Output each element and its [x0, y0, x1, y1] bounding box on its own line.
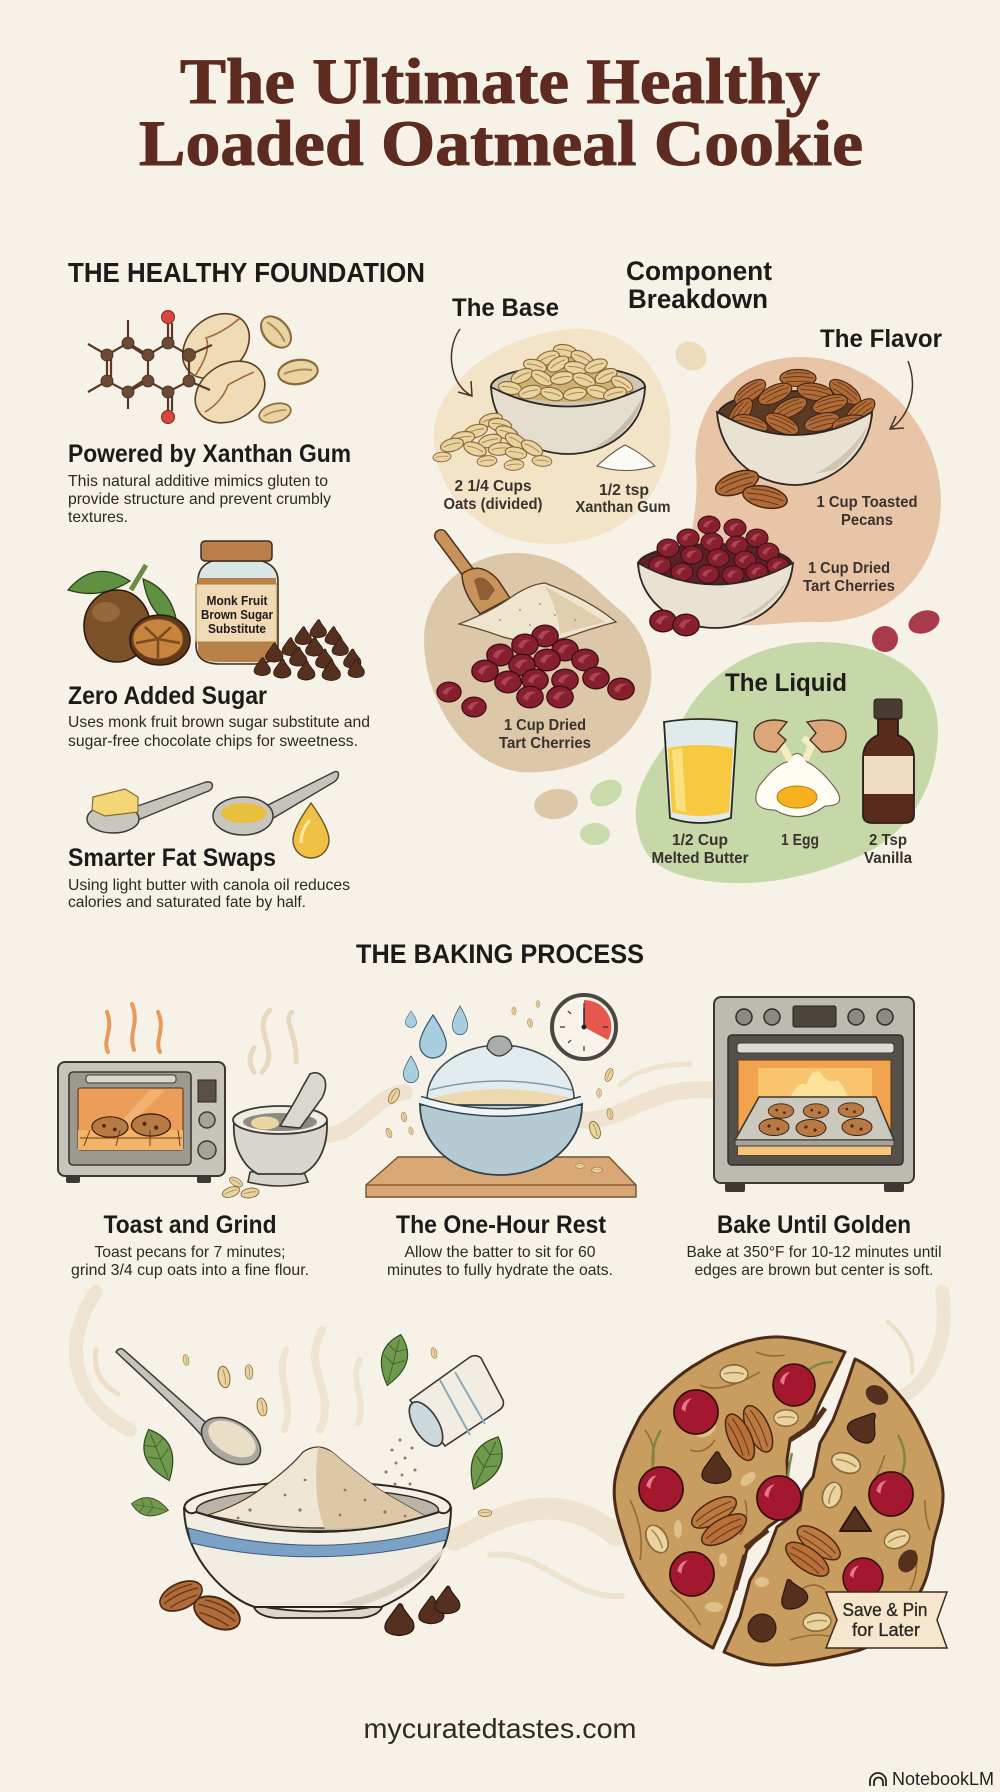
text block: the one-hour rest — [387, 1211, 613, 1279]
icon: pecans — [155, 1575, 245, 1636]
panel: the liquid — [636, 642, 938, 883]
title — [139, 46, 863, 180]
label: pecans: Pecans — [841, 512, 893, 529]
text block: smarter fat swaps: Using light butter with canola oil reduces — [68, 877, 350, 894]
footer: website: mycuratedtastes.com — [364, 1713, 636, 1744]
step: toast and grind — [58, 1004, 327, 1279]
icon: wall oven — [714, 997, 914, 1192]
icon: dried cherry pile — [437, 625, 634, 717]
text block: xanthan gum: This natural additive mimics gluten to — [68, 473, 328, 490]
icon: water drops — [403, 1006, 468, 1083]
text block: xanthan gum: Powered by Xanthan Gum — [68, 440, 351, 468]
icon: chocolate chips — [385, 1586, 460, 1636]
icon: spice shaker — [384, 1356, 503, 1486]
banner: save and pin: for Later — [852, 1620, 920, 1640]
icon: flour pile — [459, 583, 616, 642]
arrow: the flavor — [890, 361, 912, 429]
heading: component breakdown — [626, 256, 772, 314]
heading: component breakdown: Component — [626, 256, 772, 286]
icon: mortar steam — [250, 1010, 296, 1072]
text block: zero added sugar: sugar-free chocolate chips for sweetness. — [68, 733, 358, 750]
text block: toast and grind: Toast pecans for 7 minutes; — [94, 1244, 286, 1261]
text block: xanthan gum — [68, 440, 351, 526]
icon: vanilla bottle — [863, 699, 914, 823]
icon: loose pecans — [712, 465, 789, 512]
labels: liquid ingredients: Melted Butter — [652, 850, 748, 867]
text block: xanthan gum: textures. — [68, 509, 128, 526]
decorative steam and waves — [76, 1292, 944, 1596]
icon: steam — [106, 1004, 161, 1052]
text block: bake until golden: edges are brown but center is soft. — [694, 1262, 934, 1279]
icon: glass of melted butter — [664, 719, 737, 823]
label: the flavor: The Flavor — [820, 325, 942, 353]
arrow: the base — [451, 329, 472, 396]
blob: small dots — [532, 774, 627, 845]
labels: liquid ingredients: 1/2 Cup — [672, 832, 728, 849]
text block: smarter fat swaps — [68, 844, 350, 911]
text block: zero added sugar: Zero Added Sugar — [68, 682, 267, 710]
label: the liquid: The Liquid — [725, 669, 847, 697]
labels: liquid ingredients: 2 Tsp — [869, 832, 907, 849]
labels: base ingredients — [444, 478, 670, 516]
panel: the base — [433, 294, 671, 544]
decorative waves — [330, 1064, 712, 1135]
icon: xanthan gum powder — [597, 445, 655, 470]
panel: the healthy foundation — [68, 257, 425, 911]
label: the base: The Base — [452, 294, 559, 322]
label: pecans — [816, 494, 918, 529]
icon: molecule and oats — [88, 300, 319, 435]
icon: bowl of dried cherries — [638, 516, 793, 628]
icon: bowl of oats — [491, 343, 645, 454]
icon: monk fruit, jar and chocolate chips: Brown Sugar — [201, 607, 273, 622]
icon: toaster oven — [58, 1062, 225, 1183]
watermark: notebooklm: NotebookLM — [892, 1769, 994, 1789]
illustration: mixing and finished cookie — [76, 1292, 947, 1665]
labels: base ingredients: Xanthan Gum — [576, 499, 670, 516]
labels: base ingredients: 2 1/4 Cups — [454, 478, 532, 495]
title: The Ultimate Healthy — [180, 46, 820, 118]
text block: smarter fat swaps: Smarter Fat Swaps — [68, 844, 276, 872]
panel: flour and cherries — [424, 536, 651, 772]
title: Loaded Oatmeal Cookie — [139, 108, 863, 180]
icon: spoons and oil drop — [87, 772, 338, 858]
icon: cutting board — [366, 1157, 636, 1197]
icon: loose oats — [433, 411, 552, 471]
text block: zero added sugar — [68, 682, 370, 750]
labels: base ingredients: Oats (divided) — [444, 496, 542, 513]
labels: base ingredients: 1/2 tsp — [599, 482, 649, 499]
labels: liquid ingredients: Vanilla — [864, 850, 912, 867]
icon: monk fruit, jar and chocolate chips: Substitute — [208, 621, 266, 636]
icon: floating oats — [385, 1000, 615, 1173]
text block: bake until golden: Bake Until Golden — [717, 1211, 911, 1239]
icon: loose cherries — [650, 610, 699, 636]
heading: the baking process: THE BAKING PROCESS — [356, 939, 644, 969]
heading: component breakdown: Breakdown — [628, 284, 768, 314]
label: tart cherries — [499, 717, 591, 752]
icon: bowl of pecans — [717, 370, 879, 485]
panel: the flavor — [638, 325, 942, 636]
icon: covered bowl — [420, 1036, 582, 1175]
icon: wooden scoop — [441, 536, 510, 614]
step: the one-hour rest — [366, 995, 636, 1279]
icon: cracked egg — [754, 720, 846, 817]
banner: save and pin: Save & Pin — [842, 1600, 928, 1620]
icon: mixing bowl — [184, 1447, 451, 1618]
text block: smarter fat swaps: calories and saturated fate by half. — [68, 894, 306, 911]
text block: toast and grind — [71, 1211, 309, 1279]
panel: component breakdown — [424, 256, 943, 883]
blob: decorative tan dot — [670, 336, 712, 376]
text block: the one-hour rest: minutes to fully hydrate the oats. — [387, 1262, 613, 1279]
text block: bake until golden — [686, 1211, 942, 1279]
label: tart cherries: 1 Cup Dried — [504, 717, 586, 734]
label: tart cherries: Tart Cherries — [803, 578, 895, 595]
icon: leaves — [130, 1331, 511, 1519]
text block: zero added sugar: Uses monk fruit brown sugar substitute and — [68, 714, 370, 731]
text block: bake until golden: Bake at 350°F for 10-12 minutes until — [686, 1244, 942, 1261]
step: bake until golden — [686, 997, 942, 1279]
icon: floating oats — [182, 1347, 492, 1517]
panel: the baking process — [58, 939, 942, 1279]
text block: the one-hour rest: The One-Hour Rest — [396, 1211, 607, 1239]
label: pecans: 1 Cup Toasted — [816, 494, 918, 511]
labels: liquid ingredients: 1 Egg — [781, 832, 819, 849]
banner: save and pin — [826, 1592, 947, 1648]
labels: liquid ingredients — [652, 832, 912, 867]
label: tart cherries: Tart Cherries — [499, 735, 591, 752]
icon: timer — [552, 995, 616, 1059]
heading: the healthy foundation: THE HEALTHY FOUNDATION — [68, 257, 425, 288]
icon: mortar and pestle — [221, 1073, 327, 1200]
icon: monk fruit, jar and chocolate chips — [68, 541, 364, 681]
icon: broken cookie — [614, 1337, 943, 1665]
text block: the one-hour rest: Allow the batter to sit for 60 — [404, 1244, 596, 1261]
text block: toast and grind: Toast and Grind — [104, 1211, 276, 1239]
text block: toast and grind: grind 3/4 cup oats into a fine flour. — [71, 1262, 309, 1279]
blob: red dots — [872, 606, 943, 652]
text block: xanthan gum: provide structure and prevent crumbly — [68, 491, 331, 508]
label: tart cherries: 1 Cup Dried — [808, 560, 890, 577]
label: tart cherries — [803, 560, 895, 595]
icon: monk fruit, jar and chocolate chips: Monk Fruit — [206, 593, 268, 608]
icon: spoon of flour — [116, 1349, 269, 1474]
